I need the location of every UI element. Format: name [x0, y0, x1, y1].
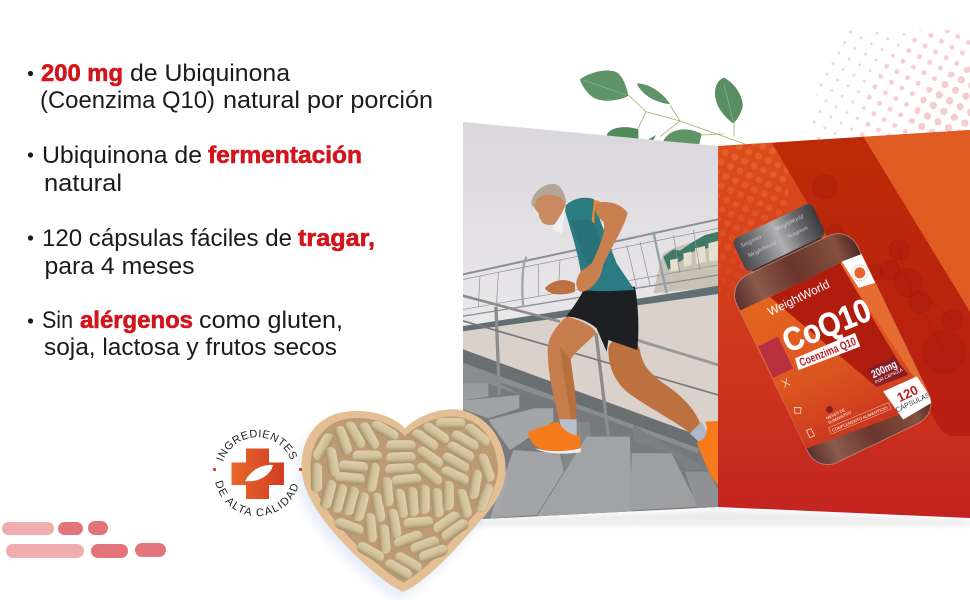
dose tag: 200mg: [870, 359, 899, 381]
bottle glass: [727, 226, 938, 472]
bullet 2: [28, 142, 362, 197]
neck mask: [552, 204, 566, 234]
bullet 3: tragar,: [298, 225, 375, 252]
bullet 2: Ubiquinona de: [42, 142, 202, 169]
capsules: [311, 418, 496, 582]
eucalyptus branch: [580, 71, 745, 144]
bullet 3: 120 cápsulas fáciles de: [42, 225, 292, 252]
dark diagonal band: [772, 136, 970, 436]
heart glow shadow: [297, 417, 501, 600]
panel: red product background: [718, 125, 970, 525]
left red square: [758, 337, 793, 378]
bottle cap: [732, 202, 831, 283]
bullet 3: [28, 225, 375, 280]
bullet 4: como gluten,: [199, 307, 343, 334]
dose tag: POR CÁPSULA: [874, 366, 904, 385]
bottle cap: WeightWorld: [747, 240, 778, 259]
product bottle: [734, 204, 932, 466]
capsule count tag: CÁPSULAS: [894, 390, 932, 414]
bottle cap: Seagreen: [787, 225, 809, 240]
background halftone dots: [800, 30, 970, 140]
circular text bottom: DE ALTA CALIDAD: [215, 480, 298, 516]
rear arm and hand: [545, 280, 575, 294]
bullet 1: (Coenzima Q10): [40, 87, 215, 114]
front leg: [548, 317, 596, 422]
quality ingredients badge: [212, 430, 302, 516]
back leg: [608, 337, 701, 433]
supplement strip: COMPLEMENTO ALIMENTICIO: [831, 405, 888, 433]
halftone patch: [718, 142, 788, 268]
heart tray with capsules: [302, 409, 506, 592]
bullet 4: [28, 307, 343, 361]
bullet 2: natural: [44, 170, 122, 197]
capsule count tag: 120: [894, 382, 920, 405]
molecule illustration: [813, 175, 965, 373]
man running: [528, 184, 719, 486]
wooden heart: [302, 409, 506, 592]
socks: [559, 419, 577, 438]
bullet list: [28, 60, 433, 361]
coenzyme tag: Coenzima Q10: [798, 336, 858, 369]
product name: CoQ10: [777, 291, 876, 359]
decorative pill bars: [2, 521, 166, 558]
light label strip: [840, 254, 929, 394]
bullet 1: natural por porción: [223, 87, 433, 114]
orange shoes: [528, 422, 581, 452]
bottle cap: Seagreen: [740, 234, 762, 249]
head: [534, 192, 566, 225]
circular text top: INGREDIENTES: [216, 430, 297, 461]
grey hair: [531, 184, 567, 207]
supplement strip: MESES DE: [825, 407, 846, 421]
bullet 1: de Ubiquinona: [130, 60, 291, 87]
shorts: [566, 287, 638, 352]
orange top right area: [863, 125, 970, 320]
orange cross: [232, 448, 284, 499]
bullet 2: fermentación: [208, 142, 362, 169]
bottle cap: WeightWorld: [774, 214, 806, 233]
soft shadow under panels: [463, 510, 970, 526]
red dots: [213, 468, 302, 471]
tray interior: [311, 417, 498, 583]
capsule count tag: [883, 376, 931, 420]
photo sky and stairs scenery: [460, 120, 720, 520]
bullet 1: 200 mg: [41, 60, 123, 87]
front arm and hand: [576, 202, 628, 292]
bullet 4: alérgenos: [80, 307, 193, 334]
supplement strip: SUMINISTRO: [827, 410, 852, 425]
dark label wedge: [770, 264, 899, 387]
far railing: [460, 219, 718, 317]
near railing: [460, 295, 718, 437]
white leaf: [245, 465, 273, 481]
brand name: WeightWorld: [765, 277, 832, 319]
side icons: [779, 378, 814, 439]
shirt: [564, 198, 635, 291]
product label: [740, 254, 931, 448]
bullet 1: [28, 60, 433, 114]
bullet 3: para 4 meses: [44, 253, 194, 280]
bullet 4: Sin: [42, 307, 73, 334]
panel: runner photo: [460, 120, 720, 520]
coenzyme tag: [795, 332, 860, 370]
certification badge: [842, 254, 876, 288]
bullet 4: soja, lactosa y frutos secos: [44, 334, 337, 361]
